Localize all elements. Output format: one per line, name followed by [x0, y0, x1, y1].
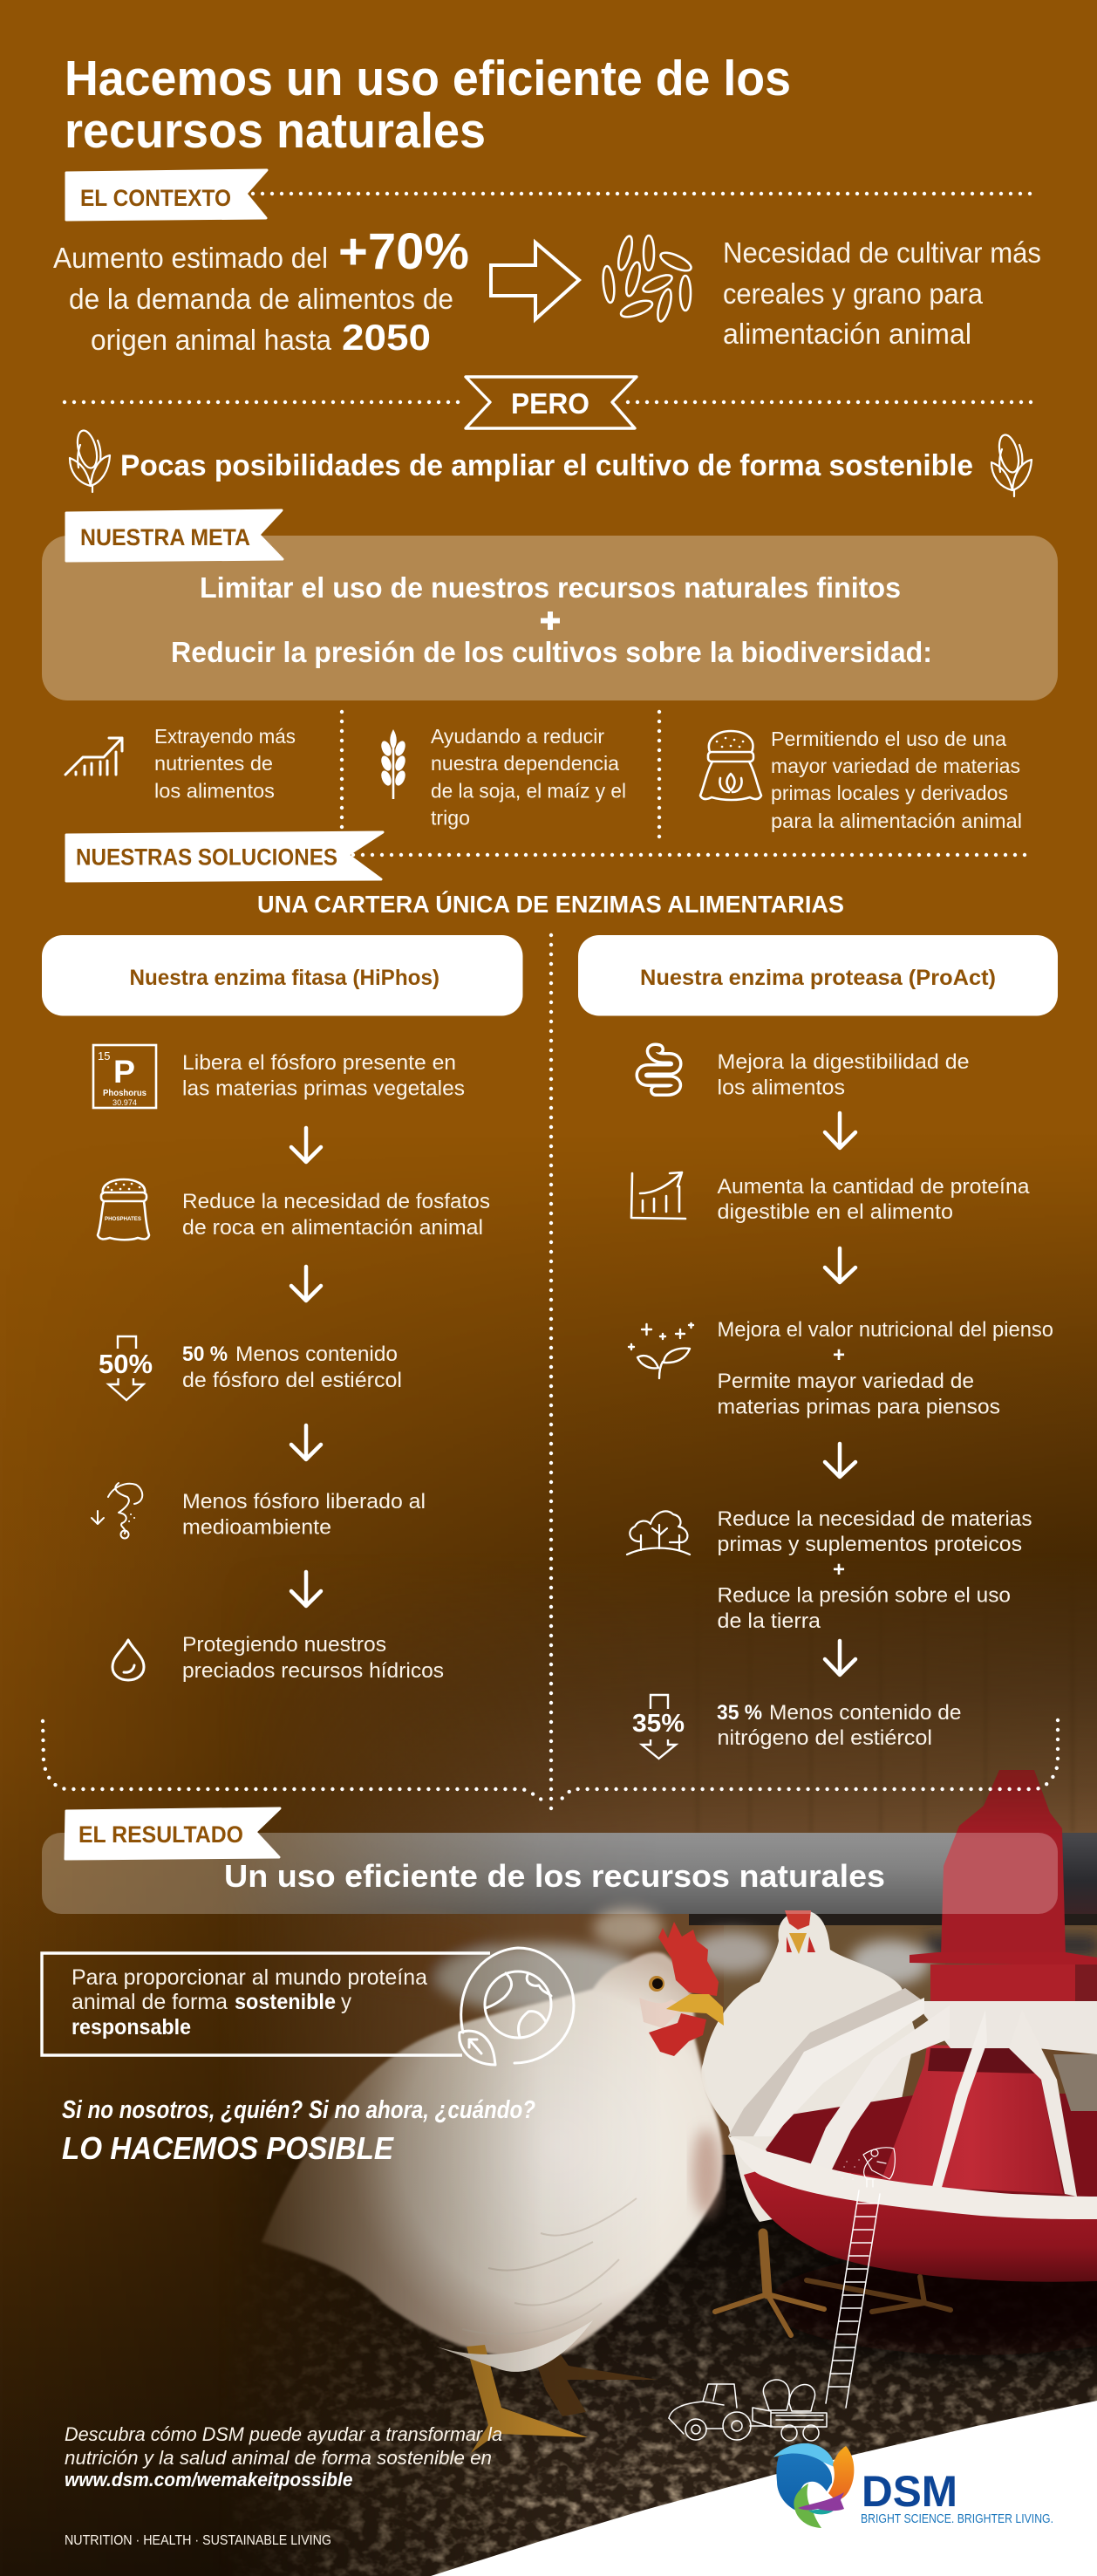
icon: phosphorus release cloud [92, 1483, 142, 1539]
text: step 4 protease: primas y suplementos proteicos [717, 1533, 1022, 1556]
ribbon: el resultado [65, 1808, 280, 1859]
arrow: down [825, 1641, 855, 1675]
dotted separators: three benefits [342, 712, 659, 838]
text: step 2 protease: Aumenta la cantidad de proteína [717, 1175, 1030, 1199]
text: step 3 phytase: 50 % [182, 1343, 228, 1366]
ribbon: el contexto [66, 170, 267, 220]
text: closing question: Si no nosotros, ¿quién? Si no ahora, ¿cuándo? [62, 2096, 535, 2124]
icon: corn left [70, 428, 110, 492]
callout: purpose box: Para proporcionar al mundo proteína [72, 1965, 427, 1990]
text: need for more grain: Necesidad de cultivar más [723, 236, 1041, 269]
icon: phosphates sack: PHOSPHATES [105, 1216, 142, 1222]
text: step 2 phytase: de roca en alimentación animal [182, 1216, 483, 1240]
main hen [262, 1922, 724, 2453]
icon: 35 percent down [632, 1695, 685, 1759]
text: limited expansion: Pocas posibilidades de ampliar el cultivo de forma sostenible [120, 449, 973, 482]
text: footer tagline: NUTRITION · HEALTH · SUSTAINABLE LIVING [65, 2533, 331, 2548]
photo: hens and feeder [209, 1553, 1097, 2576]
ribbon: pero: PERO [511, 387, 589, 420]
icon: phosphates sack [98, 1179, 149, 1240]
text: reduce dependency: trigo [431, 806, 470, 829]
text: demand increase: de la demanda de alimentos de [69, 283, 453, 315]
callout: purpose box: sostenible [235, 1990, 336, 2014]
ribbon: nuestras soluciones: NUESTRAS SOLUCIONES [76, 844, 337, 871]
callout: purpose box: responsable [72, 2015, 191, 2040]
icon: phosphorus element: Phoshorus [103, 1089, 146, 1098]
dotted flow lines: solutions converge [43, 935, 1058, 1814]
ribbon: pero [466, 377, 637, 428]
text: step 1 protease: Mejora la digestibilidad de [717, 1050, 970, 1074]
text: step 1 phytase [182, 1051, 465, 1101]
ribbon: el contexto: EL CONTEXTO [80, 185, 231, 211]
panel: goal [42, 536, 1058, 700]
text: step 2 protease [717, 1175, 1030, 1224]
title: Hacemos un uso eficiente de los [65, 51, 791, 106]
icon: 50 percent down [99, 1336, 153, 1400]
text: step 3 phytase: de fósforo del estiércol [182, 1369, 402, 1392]
arrow: down [825, 1113, 855, 1148]
text: step 4 protease: de la tierra [717, 1609, 821, 1633]
callout: purpose box: animal de forma [72, 1990, 228, 2014]
back hen [701, 1910, 916, 2222]
icon: phosphorus element: 15 [98, 1049, 110, 1063]
text: step 5 protease: 35 % [717, 1701, 762, 1725]
icon: wheat [379, 729, 407, 799]
text: wider raw materials [771, 728, 1022, 832]
text: step 1 protease: los alimentos [717, 1076, 845, 1099]
logo: DSM: BRIGHT SCIENCE. BRIGHTER LIVING. [861, 2511, 1053, 2526]
text: wider raw materials: primas locales y derivados [771, 782, 1008, 804]
text: step 3 protease: Mejora el valor nutricional del pienso [717, 1318, 1053, 1342]
text: more nutrients: nutrientes de [154, 752, 273, 775]
arrow: down [825, 1248, 855, 1282]
text: demand increase: Aumento estimado del [53, 242, 328, 274]
text: step 5 phytase: Protegiendo nuestros [182, 1633, 386, 1657]
logo: DSM [773, 2443, 1053, 2528]
text: step 5 phytase: preciados recursos hídricos [182, 1659, 444, 1683]
dotted line: contexto [253, 192, 1033, 195]
text: demand increase: 2050 [342, 317, 431, 358]
panel heading: phytase [42, 935, 523, 1015]
icon: globe with leaf [460, 1948, 574, 2065]
icon: water drop [112, 1640, 144, 1680]
white corner [431, 2401, 1097, 2576]
text: reduce dependency [431, 725, 626, 829]
text: step 2 protease: digestible en el alimento [717, 1200, 953, 1224]
text: need for more grain: alimentación animal [723, 318, 971, 350]
icon: intestine [642, 1049, 677, 1090]
panel: goal: Reducir la presión de los cultivos sobre la biodiversidad: [171, 636, 932, 668]
text: step 2 phytase [182, 1190, 490, 1240]
text: call to action: www.dsm.com/wemakeitpossible [65, 2469, 352, 2491]
text: step 5 protease: Menos contenido de [769, 1701, 961, 1725]
panel heading: phytase: Nuestra enzima fitasa (HiPhos) [129, 966, 439, 990]
panel: goal: Limitar el uso de nuestros recursos naturales finitos [200, 571, 901, 604]
icon: growth chart [631, 1172, 685, 1219]
text: more nutrients: Extrayendo más [154, 725, 296, 748]
text: demand increase [53, 223, 469, 358]
text: step 3 phytase [182, 1343, 402, 1392]
icon: sprout with plus signs [629, 1323, 693, 1378]
text: step 5 protease: nitrógeno del estiércol [717, 1726, 932, 1750]
callout: purpose box [42, 1953, 490, 2055]
panel: result [42, 1833, 1058, 1914]
text: step 3 protease: materias primas para piensos [717, 1396, 1000, 1418]
arrow: right outline [491, 243, 579, 319]
text: step 4 phytase: medioambiente [182, 1516, 331, 1539]
arrow: down [291, 1572, 321, 1606]
text: wider raw materials: para la alimentación animal [771, 810, 1022, 832]
icon: corn right [991, 433, 1032, 496]
text: demand increase: +70% [338, 223, 469, 280]
panel: result: Un uso eficiente de los recursos naturales [224, 1858, 885, 1894]
icon: grains [602, 235, 693, 323]
text: step 3 protease: Permite mayor variedad de [717, 1370, 974, 1393]
text: reduce dependency: de la soja, el maíz y el [431, 780, 626, 803]
text: step 4 protease: Reduce la necesidad de materias [717, 1507, 1032, 1531]
background [0, 1190, 1097, 2576]
icon: 50 percent down: 50% [99, 1349, 153, 1379]
text: slogan: LO HACEMOS POSIBLE [62, 2130, 394, 2166]
text: step 4 phytase: Menos fósforo liberado al [182, 1490, 426, 1513]
icon: phosphorus element: 30.974 [112, 1098, 137, 1108]
subheading: UNA CARTERA ÚNICA DE ENZIMAS ALIMENTARIAS [257, 891, 844, 918]
text: need for more grain: cereales y grano para [723, 277, 984, 310]
feeder [728, 1770, 1097, 2282]
title: recursos naturales [65, 103, 486, 159]
arrow: down [291, 1267, 321, 1301]
icon: tractor with trailer [669, 2380, 827, 2441]
text: step 1 protease [717, 1050, 970, 1099]
text: step 2 phytase: Reduce la necesidad de fosfatos [182, 1190, 490, 1213]
ribbon: nuestra meta [66, 510, 283, 561]
icon: ladder [826, 2190, 880, 2408]
text: reduce dependency: nuestra dependencia [431, 752, 619, 775]
dotted lines: pero [65, 400, 1033, 404]
text: need for more grain [723, 236, 1041, 350]
text: step 5 phytase [182, 1633, 444, 1683]
text: step 3 protease: + [833, 1343, 845, 1367]
icon: sack with leaves [700, 731, 761, 800]
text: wider raw materials: mayor variedad de materias [771, 755, 1020, 777]
icon: man pouring sack [839, 2148, 895, 2187]
arrow: down [825, 1444, 855, 1477]
text: call to action [65, 2423, 502, 2491]
arrow: down [291, 1425, 321, 1459]
text: step 4 protease: + [833, 1558, 845, 1582]
text: reduce dependency: Ayudando a reducir [431, 725, 604, 748]
icon: phosphorus element: P [113, 1054, 135, 1090]
text: step 5 protease [717, 1701, 961, 1750]
logo: DSM: DSM [862, 2467, 957, 2516]
back hen legs [715, 2233, 951, 2335]
dotted line: soluciones [353, 853, 1033, 857]
ribbon: el resultado: EL RESULTADO [78, 1821, 243, 1848]
icon: 35 percent down: 35% [632, 1710, 685, 1738]
text: wider raw materials: Permitiendo el uso de una [771, 728, 1006, 750]
arrow: down [291, 1128, 321, 1162]
ribbon: nuestra meta: NUESTRA META [80, 524, 250, 550]
text: step 4 protease [717, 1507, 1032, 1633]
text: step 4 phytase [182, 1490, 426, 1539]
callout: purpose box: y [341, 1990, 351, 2014]
icon: growth chart small [65, 738, 122, 775]
ribbon: nuestras soluciones [66, 832, 383, 881]
text: step 3 phytase: Menos contenido [235, 1343, 398, 1366]
text: more nutrients: los alimentos [154, 780, 275, 803]
icon: phosphorus element [93, 1045, 156, 1108]
title [65, 51, 791, 159]
text: call to action: Descubra cómo DSM puede ayudar a transformar la [65, 2423, 502, 2445]
icon: trees [627, 1511, 690, 1554]
text: more nutrients [154, 725, 296, 803]
panel heading: protease: Nuestra enzima proteasa (ProAct) [640, 966, 996, 990]
text: step 3 protease [717, 1318, 1053, 1418]
text: step 1 phytase: Libera el fósforo presente en [182, 1051, 456, 1075]
text: step 4 protease: Reduce la presión sobre el uso [717, 1584, 1011, 1607]
text: call to action: nutrición y la salud animal de forma sostenible en [65, 2447, 492, 2469]
panel heading: protease [578, 935, 1058, 1015]
text: demand increase: origen animal hasta [91, 324, 332, 356]
text: step 1 phytase: las materias primas vegetales [182, 1076, 465, 1101]
